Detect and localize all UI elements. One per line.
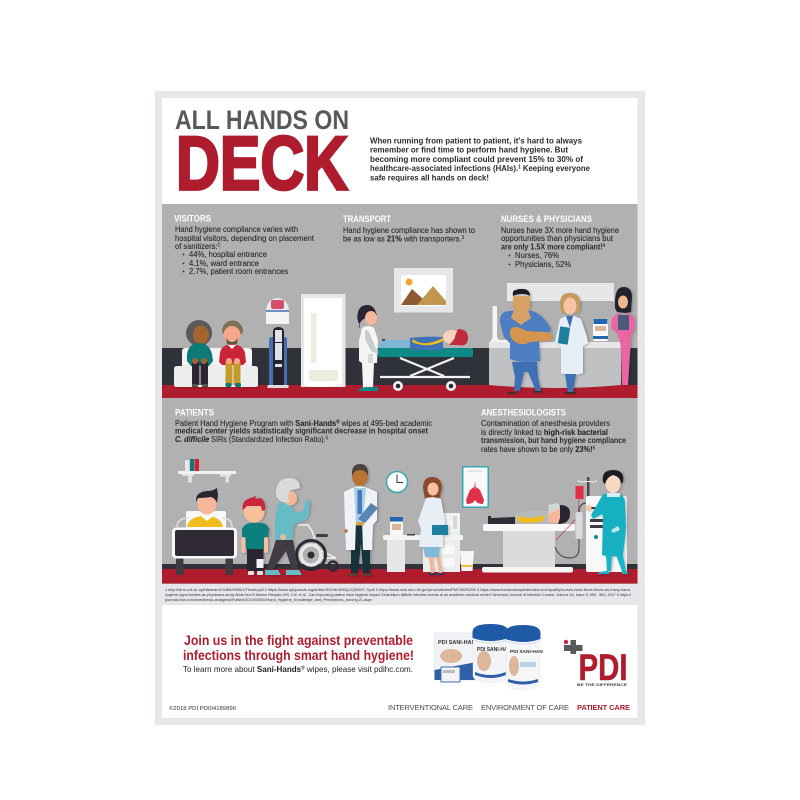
- icon: hand sanitizer dispenser: [266, 298, 289, 388]
- panel: nurses and physicians text: are only 1.5X more compliant!: [501, 242, 623, 252]
- panel: visitors text: [174, 214, 315, 276]
- title: [175, 105, 349, 206]
- panel: anesthesiologists text: 6: [593, 446, 595, 452]
- product canister right: PDI SANI-HAN: [510, 649, 543, 655]
- panel: call to action: [162, 605, 638, 718]
- panel: transport text: [343, 214, 475, 244]
- intro text: healthcare-associated infections (HAIs).: [370, 163, 533, 173]
- call to action text: wipes, please visit pdihc.com.: [305, 664, 413, 674]
- panel: anesthesiologists text: [481, 408, 626, 454]
- icon: sofa with visitors: [174, 320, 258, 387]
- panel: patients text: [175, 408, 433, 444]
- logo: PDI: [564, 640, 628, 688]
- transporter: [357, 305, 386, 391]
- panel: transport text: 3: [462, 235, 464, 241]
- logo: PDI: PDI: [578, 647, 628, 688]
- logo: PDI: BE THE DIFFERENCE: [577, 683, 628, 687]
- panel: transport text: be as low as 21% with transporters.: [343, 234, 470, 244]
- panel: transport text: Hand hygiene compliance has shown to: [343, 225, 475, 235]
- panel: anesthesiologists text: Contamination of anesthesia providers: [481, 418, 610, 428]
- panel: patients text: Patient Hand Hygiene Program with Sani-Hands: [175, 418, 343, 428]
- intro text: When running from patient to patient, it's hard to always: [370, 135, 582, 145]
- intro text: [370, 135, 590, 182]
- panel: patients text: medical center yields statistically significant decrease in hospital onset: [175, 426, 428, 436]
- panel: visitors text: 2.7%, patient room entrances: [189, 266, 288, 276]
- poster frame: [155, 91, 645, 725]
- panel: transport text: TRANSPORT: [343, 214, 391, 225]
- panel: nurses and physicians text: NURSES & PHYSICIANS: [501, 214, 592, 225]
- product photo: sani-hands packaging: [434, 624, 543, 690]
- panel: visitors text: 4.1%, ward entrance: [189, 258, 259, 268]
- panel: nurses and physicians text: opportunities than physicians but: [501, 233, 614, 243]
- title: ALL HANDS ON: [175, 105, 349, 135]
- panel: patients text: C. difficile SIRs (Standardized Infection Ratio).: [175, 434, 349, 444]
- icon: nurses station: [489, 283, 621, 388]
- footnotes: 1 http://kb.tc.ucl.ac.cy/bitstream/10468/4095/1/Thesis.pdf 2 https://www.ajicjournal.org/article/S0196-6553(12)00057-7/pdf 3 https://www.ncbi.nlm.nih.gov/pmc/articles/PMC5025259/ 4 https://www.beckershospitalreview.com/quality/nurses-have-three-times-as-many-hand-: [165, 588, 632, 592]
- icon: female doctor at desk: [555, 293, 588, 394]
- product box: PDI SANI-HANDS: [438, 640, 484, 646]
- panel: patients text: PATIENTS: [175, 408, 214, 418]
- panel: patients text: ®: [336, 418, 340, 426]
- panel: visitors text: Hand hygiene compliance varies with: [175, 224, 298, 234]
- icon: boy with bandaged leg: [242, 496, 269, 575]
- panel: anesthesiologists text: transmission, but hand hygiene compliance: [481, 435, 626, 445]
- panel: nurses and physicians text: Nurses, 76%: [515, 250, 559, 260]
- footnotes: [164, 588, 632, 602]
- icon: wall shelf with books: [178, 459, 236, 482]
- call to action text: infections through smart hand hygiene!: [183, 647, 414, 663]
- icon: anesthesia machine: [555, 477, 627, 572]
- footer care categories: [388, 703, 630, 712]
- panel: visitors text: VISITORS: [174, 214, 211, 224]
- icon: anesthesiologist: [586, 470, 628, 574]
- gray illustration panel: [162, 204, 638, 584]
- panel: visitors text: hospital visitors, depending on placement: [175, 233, 315, 243]
- footer care categories: ENVIRONMENT OF CARE: [481, 703, 569, 712]
- footer copyright: ©2018 PDI PDI04189896: [169, 705, 236, 712]
- panel: patients text: wipes at 495-bed academic: [339, 418, 433, 428]
- icon: wall clock: [386, 472, 408, 492]
- icon: stretcher with patient and transporter: [357, 305, 473, 391]
- stretcher frame: [380, 358, 470, 377]
- icon: wall picture: [394, 268, 453, 312]
- footnotes: hygiene-opportunities-as-physicians-study-finds.html 5 Marlon Pelryako MS, CIC et al., Can improving patient hand hygiene impact Clostridium difficile infection events at an academic medical center? American Journal of Infection Control, Volume 45, Issue 9, 959 - 963, 2017 6 https://: [165, 593, 631, 597]
- footnotes: journals.lww.com/anesthesia-analgesia/Fulltext/2019/04000/Hand_Hygiene_Knowledge_and_Perceptions_Among.21.aspx: [164, 598, 372, 602]
- visitor: woman: [186, 320, 213, 387]
- call to action text: Join us in the fight against preventable: [184, 632, 413, 648]
- visitor: man: [219, 320, 246, 387]
- icon: nurse in pink: [611, 287, 635, 385]
- panel: anesthesiologists text: rates have shown to be only 23%!: [481, 444, 595, 454]
- panel: anesthesiologists text: is directly linked to high-risk bacterial: [481, 427, 608, 437]
- icon: male doctor: [344, 464, 378, 576]
- panel: visitors text: 2: [218, 242, 220, 248]
- footer care categories: INTERVENTIONAL CARE: [388, 703, 473, 712]
- icon: operating table with patient: [482, 503, 575, 572]
- title: DECK: [176, 122, 348, 206]
- intro text: Keeping everyone: [521, 163, 590, 173]
- panel: anesthesiologists text: ANESTHESIOLOGISTS: [481, 408, 566, 418]
- intro text: remember or find time to perform hand hygiene. But: [370, 144, 568, 154]
- panel: nurses and physicians text: [501, 214, 619, 269]
- call to action text: ®: [301, 664, 305, 672]
- icon: lungs poster: [462, 466, 489, 508]
- panel: visitors text: of sanitizers:: [175, 241, 223, 251]
- icon: product canister at desk: [593, 319, 608, 341]
- icon: female doctor with folder: [418, 477, 448, 575]
- icon: wheelchair: [296, 525, 338, 570]
- panel: nurses and physicians text: Physicians, 52%: [515, 259, 571, 269]
- product wipe packet: [441, 667, 460, 682]
- icon: exam desk with supplies: [383, 513, 474, 572]
- call to action text: [183, 632, 414, 674]
- icon: elderly woman: [265, 478, 310, 575]
- white poster sheet: [162, 98, 638, 205]
- panel: patients text: 5: [326, 436, 328, 442]
- product canister left: PDI SANI-HAN: [477, 647, 512, 653]
- icon: door: [301, 294, 346, 387]
- patient on stretcher: [410, 329, 468, 350]
- panel: visitors text: 44%, hospital entrance: [189, 249, 267, 259]
- intro text: 1: [518, 164, 521, 170]
- intro text: safe requires all hands on deck!: [370, 172, 489, 182]
- panel: nurses and physicians text: 4: [603, 243, 605, 249]
- call to action text: To learn more about Sani-Hands: [183, 664, 304, 674]
- icon: male nurse with crossed arms: [500, 289, 552, 394]
- icon: patient in bed: [172, 488, 237, 575]
- footer care categories: PATIENT CARE: [577, 703, 630, 712]
- panel: nurses and physicians text: Nurses have 3X more hand hygiene: [501, 225, 619, 235]
- intro text: becoming more compliant could prevent 15% to 30% of: [370, 154, 583, 164]
